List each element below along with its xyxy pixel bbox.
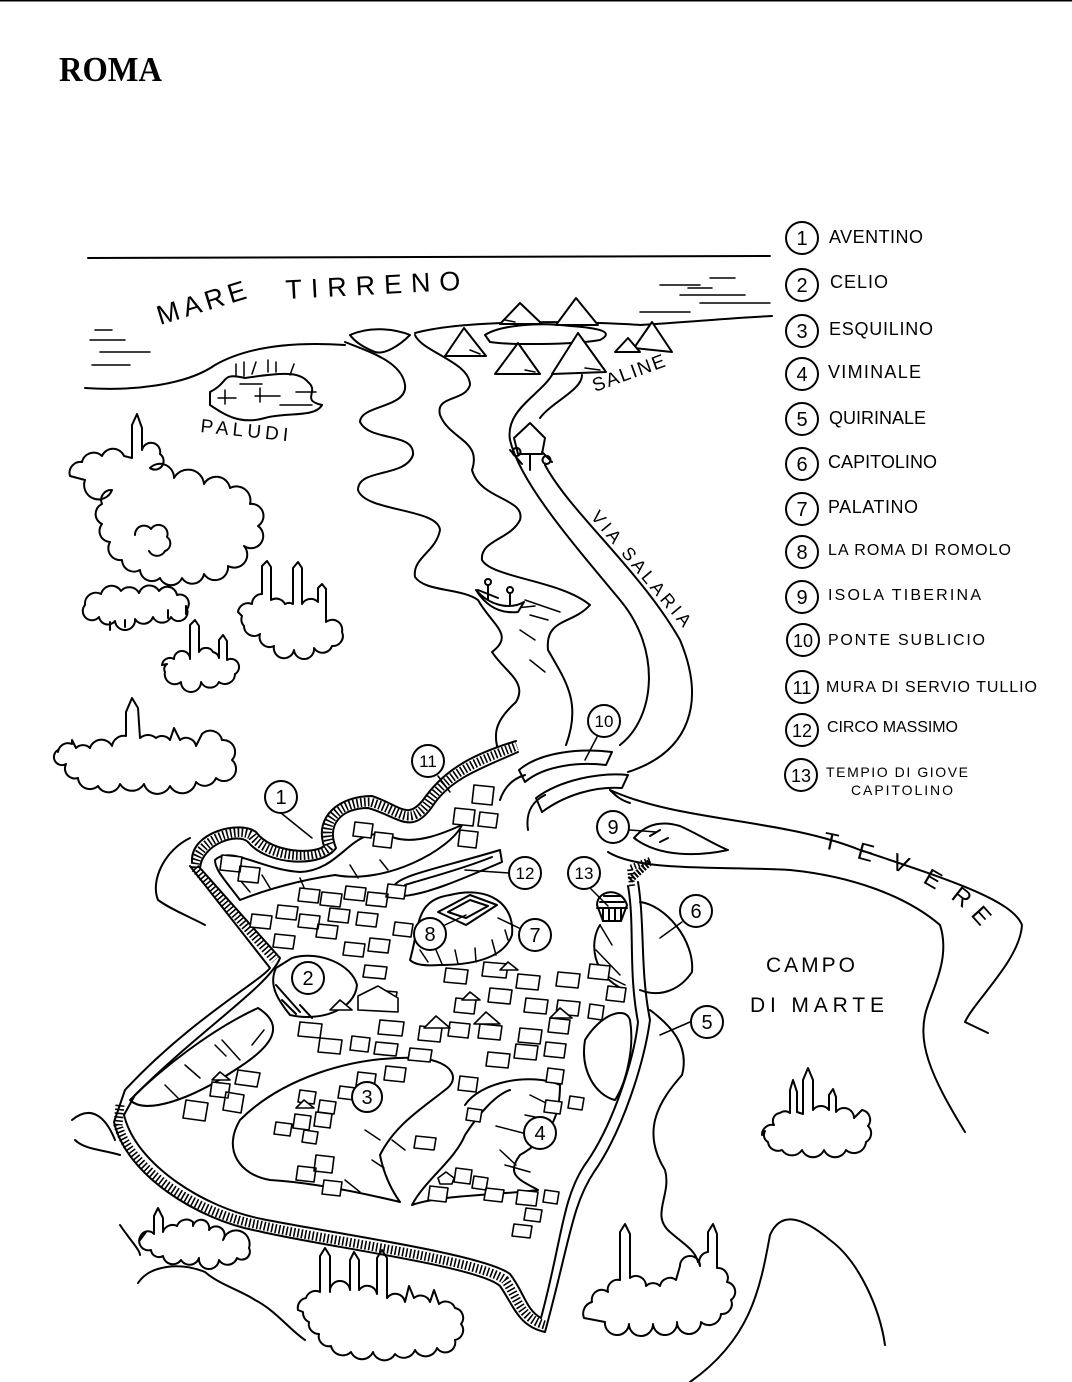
hills bbox=[130, 825, 698, 1262]
salt pans: saline: SALINE bbox=[590, 351, 668, 397]
la roma di romolo bbox=[438, 895, 497, 925]
map number markers: 2 bbox=[302, 968, 314, 990]
icon: boat bbox=[476, 579, 524, 612]
tevere river bbox=[608, 790, 1022, 1132]
hill: outer west bbox=[156, 838, 205, 925]
label: Campo di Marte bbox=[750, 954, 884, 1017]
salt pans: saline bbox=[445, 298, 672, 397]
trees: south groves bbox=[139, 1208, 735, 1360]
sea and coastline bbox=[85, 256, 772, 389]
icon: travellers on via salaria bbox=[510, 423, 552, 470]
map number markers: 12 bbox=[516, 864, 534, 883]
map number markers: 5 bbox=[701, 1012, 713, 1034]
label: Campo di Marte: DI MARTE bbox=[750, 994, 884, 1017]
hill: palatino bbox=[410, 892, 512, 965]
label: Mare Tirreno: TIRRENO bbox=[285, 266, 461, 305]
panel: legend: MURA DI SERVIO TULLIO bbox=[826, 679, 1037, 696]
map number markers: 4 bbox=[534, 1123, 546, 1145]
map number markers bbox=[265, 705, 723, 1149]
hill: esquilino bbox=[130, 1008, 273, 1106]
panel: legend: LA ROMA DI ROMOLO bbox=[828, 542, 1011, 559]
hill: celio bbox=[273, 956, 357, 1018]
map number markers: 6 bbox=[690, 901, 702, 923]
panel: legend: 11 bbox=[793, 678, 811, 698]
label: Mare Tirreno: MARE bbox=[153, 275, 250, 331]
via salaria road bbox=[510, 375, 695, 772]
map number markers: 13 bbox=[575, 864, 593, 883]
panel: legend: ESQUILINO bbox=[829, 319, 933, 339]
hill: capitolino bbox=[594, 902, 692, 993]
panel: legend: 13 bbox=[791, 766, 811, 786]
island: isola tiberina bbox=[634, 823, 728, 854]
map number markers: 8 bbox=[424, 924, 436, 946]
hill: aventino bbox=[215, 825, 462, 900]
bridge: ponte sublicio bbox=[500, 751, 630, 830]
panel: legend: 1 bbox=[796, 228, 808, 250]
hills: southern edges bbox=[72, 1113, 885, 1382]
marsh: paludi bbox=[199, 360, 322, 446]
panel: legend: 7 bbox=[796, 499, 808, 521]
label: Tevere: R bbox=[946, 881, 977, 913]
map number markers: 9 bbox=[607, 817, 619, 839]
map number markers: 10 bbox=[595, 712, 613, 731]
label: Tevere: E bbox=[966, 901, 996, 931]
panel: legend: CAPITOLINO bbox=[828, 452, 937, 472]
panel: legend: VIMINALE bbox=[828, 362, 921, 382]
panel: legend: CAPITOLINO bbox=[851, 782, 953, 798]
river delta bbox=[345, 329, 590, 746]
panel: legend: CELIO bbox=[830, 272, 888, 292]
panel: legend: 3 bbox=[796, 321, 808, 343]
panel: legend: PALATINO bbox=[828, 497, 918, 517]
panel: legend: 2 bbox=[796, 275, 808, 297]
map number markers: 11 bbox=[419, 752, 437, 771]
title: ROMA bbox=[59, 50, 163, 89]
panel: legend: 8 bbox=[796, 542, 808, 564]
panel: legend: 10 bbox=[793, 631, 813, 651]
panel: legend: TEMPIO DI GIOVE bbox=[826, 764, 968, 780]
label: Mare Tirreno bbox=[153, 266, 461, 331]
panel: legend bbox=[785, 222, 1037, 798]
trees: west grove bbox=[54, 698, 236, 794]
trees: cypress groups bbox=[162, 561, 343, 692]
map number markers: 1 bbox=[275, 787, 287, 809]
circo massimo bbox=[394, 850, 502, 896]
leader lines bbox=[281, 737, 690, 1133]
panel: legend: 4 bbox=[796, 364, 808, 386]
label: Tevere: E bbox=[854, 838, 877, 868]
map number markers: 7 bbox=[529, 925, 541, 947]
city houses bbox=[183, 785, 626, 1238]
trees: right grove bbox=[762, 1068, 871, 1157]
panel: legend: CIRCO MASSIMO bbox=[827, 719, 958, 736]
hill: viminale bbox=[412, 1079, 560, 1205]
panel: legend: PONTE SUBLICIO bbox=[828, 632, 985, 649]
roofed houses bbox=[212, 962, 572, 1184]
panel: legend: AVENTINO bbox=[829, 227, 923, 247]
trees: large forest bbox=[70, 414, 264, 630]
panel: legend: QUIRINALE bbox=[829, 408, 926, 428]
label: Tevere: V bbox=[888, 849, 913, 880]
city wall bbox=[114, 741, 650, 1332]
label: Tevere: T bbox=[821, 827, 841, 857]
marsh: paludi: PALUDI bbox=[199, 416, 289, 446]
map number markers: 3 bbox=[361, 1087, 373, 1109]
label: Campo di Marte: CAMPO bbox=[766, 954, 855, 977]
panel: legend: 9 bbox=[796, 587, 808, 609]
panel: legend: ISOLA TIBERINA bbox=[828, 587, 981, 604]
hill: quirinale bbox=[584, 1013, 631, 1100]
via salaria road: VIA SALARIA bbox=[587, 507, 695, 631]
label: Tevere bbox=[821, 827, 996, 931]
panel: legend: 6 bbox=[796, 454, 808, 476]
panel: legend: 5 bbox=[796, 409, 808, 431]
label: Tevere: E bbox=[919, 864, 946, 895]
tempio di giove bbox=[597, 892, 627, 921]
panel: legend: 12 bbox=[792, 721, 812, 741]
